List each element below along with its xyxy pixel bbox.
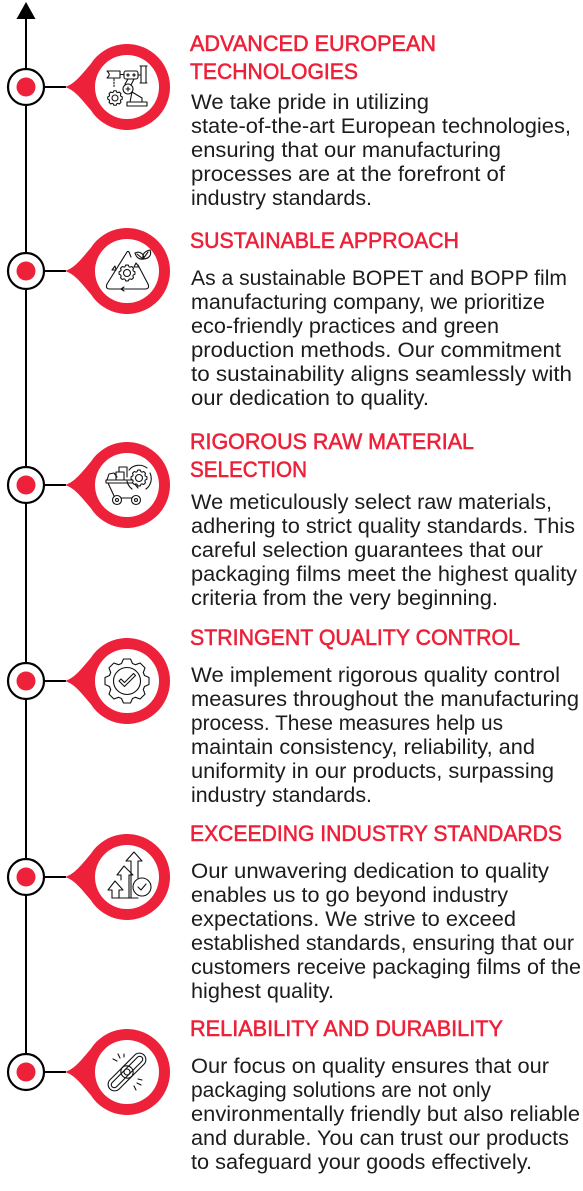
icon: gear with check mark xyxy=(105,659,149,703)
timeline node 5 xyxy=(8,859,66,895)
text block 5 xyxy=(191,860,581,1003)
timeline node 4 xyxy=(8,663,66,699)
text block 2 xyxy=(191,267,572,410)
icon: mining cart with gear xyxy=(106,465,151,504)
text block 2: eco-friendly practices and green xyxy=(191,315,499,338)
text block 4: measures throughout the manufacturing xyxy=(191,688,579,711)
text block 5: enables us to go beyond industry xyxy=(191,884,509,907)
timeline arrow xyxy=(16,2,36,1056)
text block 4: uniformity in our products, surpassing xyxy=(191,760,554,783)
text block 1: We take pride in utilizing xyxy=(191,91,429,114)
panel: rigorous raw material selection xyxy=(8,429,578,610)
pin badge 4 xyxy=(65,638,170,724)
text block 3: We meticulously select raw materials, xyxy=(191,491,552,514)
text block 3: adhering to strict quality standards. This xyxy=(191,515,575,538)
text block 6: Our focus on quality ensures that our xyxy=(191,1055,549,1078)
text block 1: industry standards. xyxy=(191,187,372,210)
pin badge 1 xyxy=(65,44,170,130)
text block 1: processes are at the forefront of xyxy=(191,163,505,186)
text block 5: established standards, ensuring that our xyxy=(191,932,574,955)
text block 3: careful selection guarantees that our xyxy=(191,539,543,562)
text block 3 xyxy=(191,491,578,610)
text block 1: ensuring that our manufacturing xyxy=(191,139,501,162)
text block 1 xyxy=(191,91,571,210)
text block 5: Our unwavering dedication to quality xyxy=(191,860,550,883)
text block 6: and durable. You can trust our products xyxy=(191,1127,569,1150)
panel: exceeding industry standards xyxy=(8,821,581,1003)
icon: recycling triangle with gear and leaves xyxy=(106,250,151,291)
heading 1: ADVANCED EUROPEAN xyxy=(190,31,436,56)
text block 5: customers receive packaging films of the xyxy=(191,956,581,979)
icon: robotic arm xyxy=(107,66,147,106)
heading 3: SELECTION xyxy=(190,457,307,482)
heading 3: RIGOROUS RAW MATERIAL xyxy=(190,429,474,454)
heading 5: EXCEEDING INDUSTRY STANDARDS xyxy=(190,821,562,846)
text block 2: manufacturing company, we prioritize xyxy=(191,291,545,314)
text block 1: state-of-the-art European technologies, xyxy=(191,115,571,138)
panel: reliability and durability xyxy=(8,1016,580,1174)
pin badge 2 xyxy=(65,228,170,314)
timeline node 6 xyxy=(8,1054,66,1090)
text block 4: We implement rigorous quality control xyxy=(191,664,560,687)
text block 6: environmentally friendly but also reliable xyxy=(191,1103,580,1126)
text block 2: As a sustainable BOPET and BOPP film xyxy=(191,267,567,290)
heading 6: RELIABILITY AND DURABILITY xyxy=(190,1016,503,1041)
panel: advanced european technologies xyxy=(8,31,571,210)
text block 5: expectations. We strive to exceed xyxy=(191,908,516,931)
text block 4: maintain consistency, reliability, and xyxy=(191,736,535,759)
text block 4 xyxy=(191,664,579,807)
text block 2: production methods. Our commitment xyxy=(191,339,561,362)
pin badge 6 xyxy=(65,1029,170,1115)
timeline node 1 xyxy=(8,69,66,105)
heading 2: SUSTAINABLE APPROACH xyxy=(190,228,459,253)
text block 3: packaging films meet the highest quality xyxy=(191,563,578,586)
icon: rising arrows with check badge xyxy=(108,852,151,898)
heading 3 xyxy=(190,429,474,482)
timeline node 2 xyxy=(8,253,66,289)
text block 2: to sustainability aligns seamlessly with xyxy=(191,363,572,386)
timeline node 3 xyxy=(8,467,66,503)
text block 5: highest quality. xyxy=(191,980,334,1003)
pin badge 3 xyxy=(65,442,170,528)
text block 3: criteria from the very beginning. xyxy=(191,587,498,610)
text block 6 xyxy=(191,1055,580,1174)
text block 6: packaging solutions are not only xyxy=(191,1079,491,1102)
heading 4: STRINGENT QUALITY CONTROL xyxy=(190,625,520,650)
panel: sustainable approach xyxy=(8,228,572,410)
panel: stringent quality control xyxy=(8,625,579,807)
text block 2: our dedication to quality. xyxy=(191,387,429,410)
text block 4: industry standards. xyxy=(191,784,372,807)
heading 1: TECHNOLOGIES xyxy=(190,59,358,84)
heading 1 xyxy=(190,31,436,84)
pin badge 5 xyxy=(65,834,170,920)
icon: chain link xyxy=(105,1050,149,1094)
text block 6: to safeguard your goods effectively. xyxy=(191,1151,532,1174)
text block 4: process. These measures help us xyxy=(191,712,503,735)
